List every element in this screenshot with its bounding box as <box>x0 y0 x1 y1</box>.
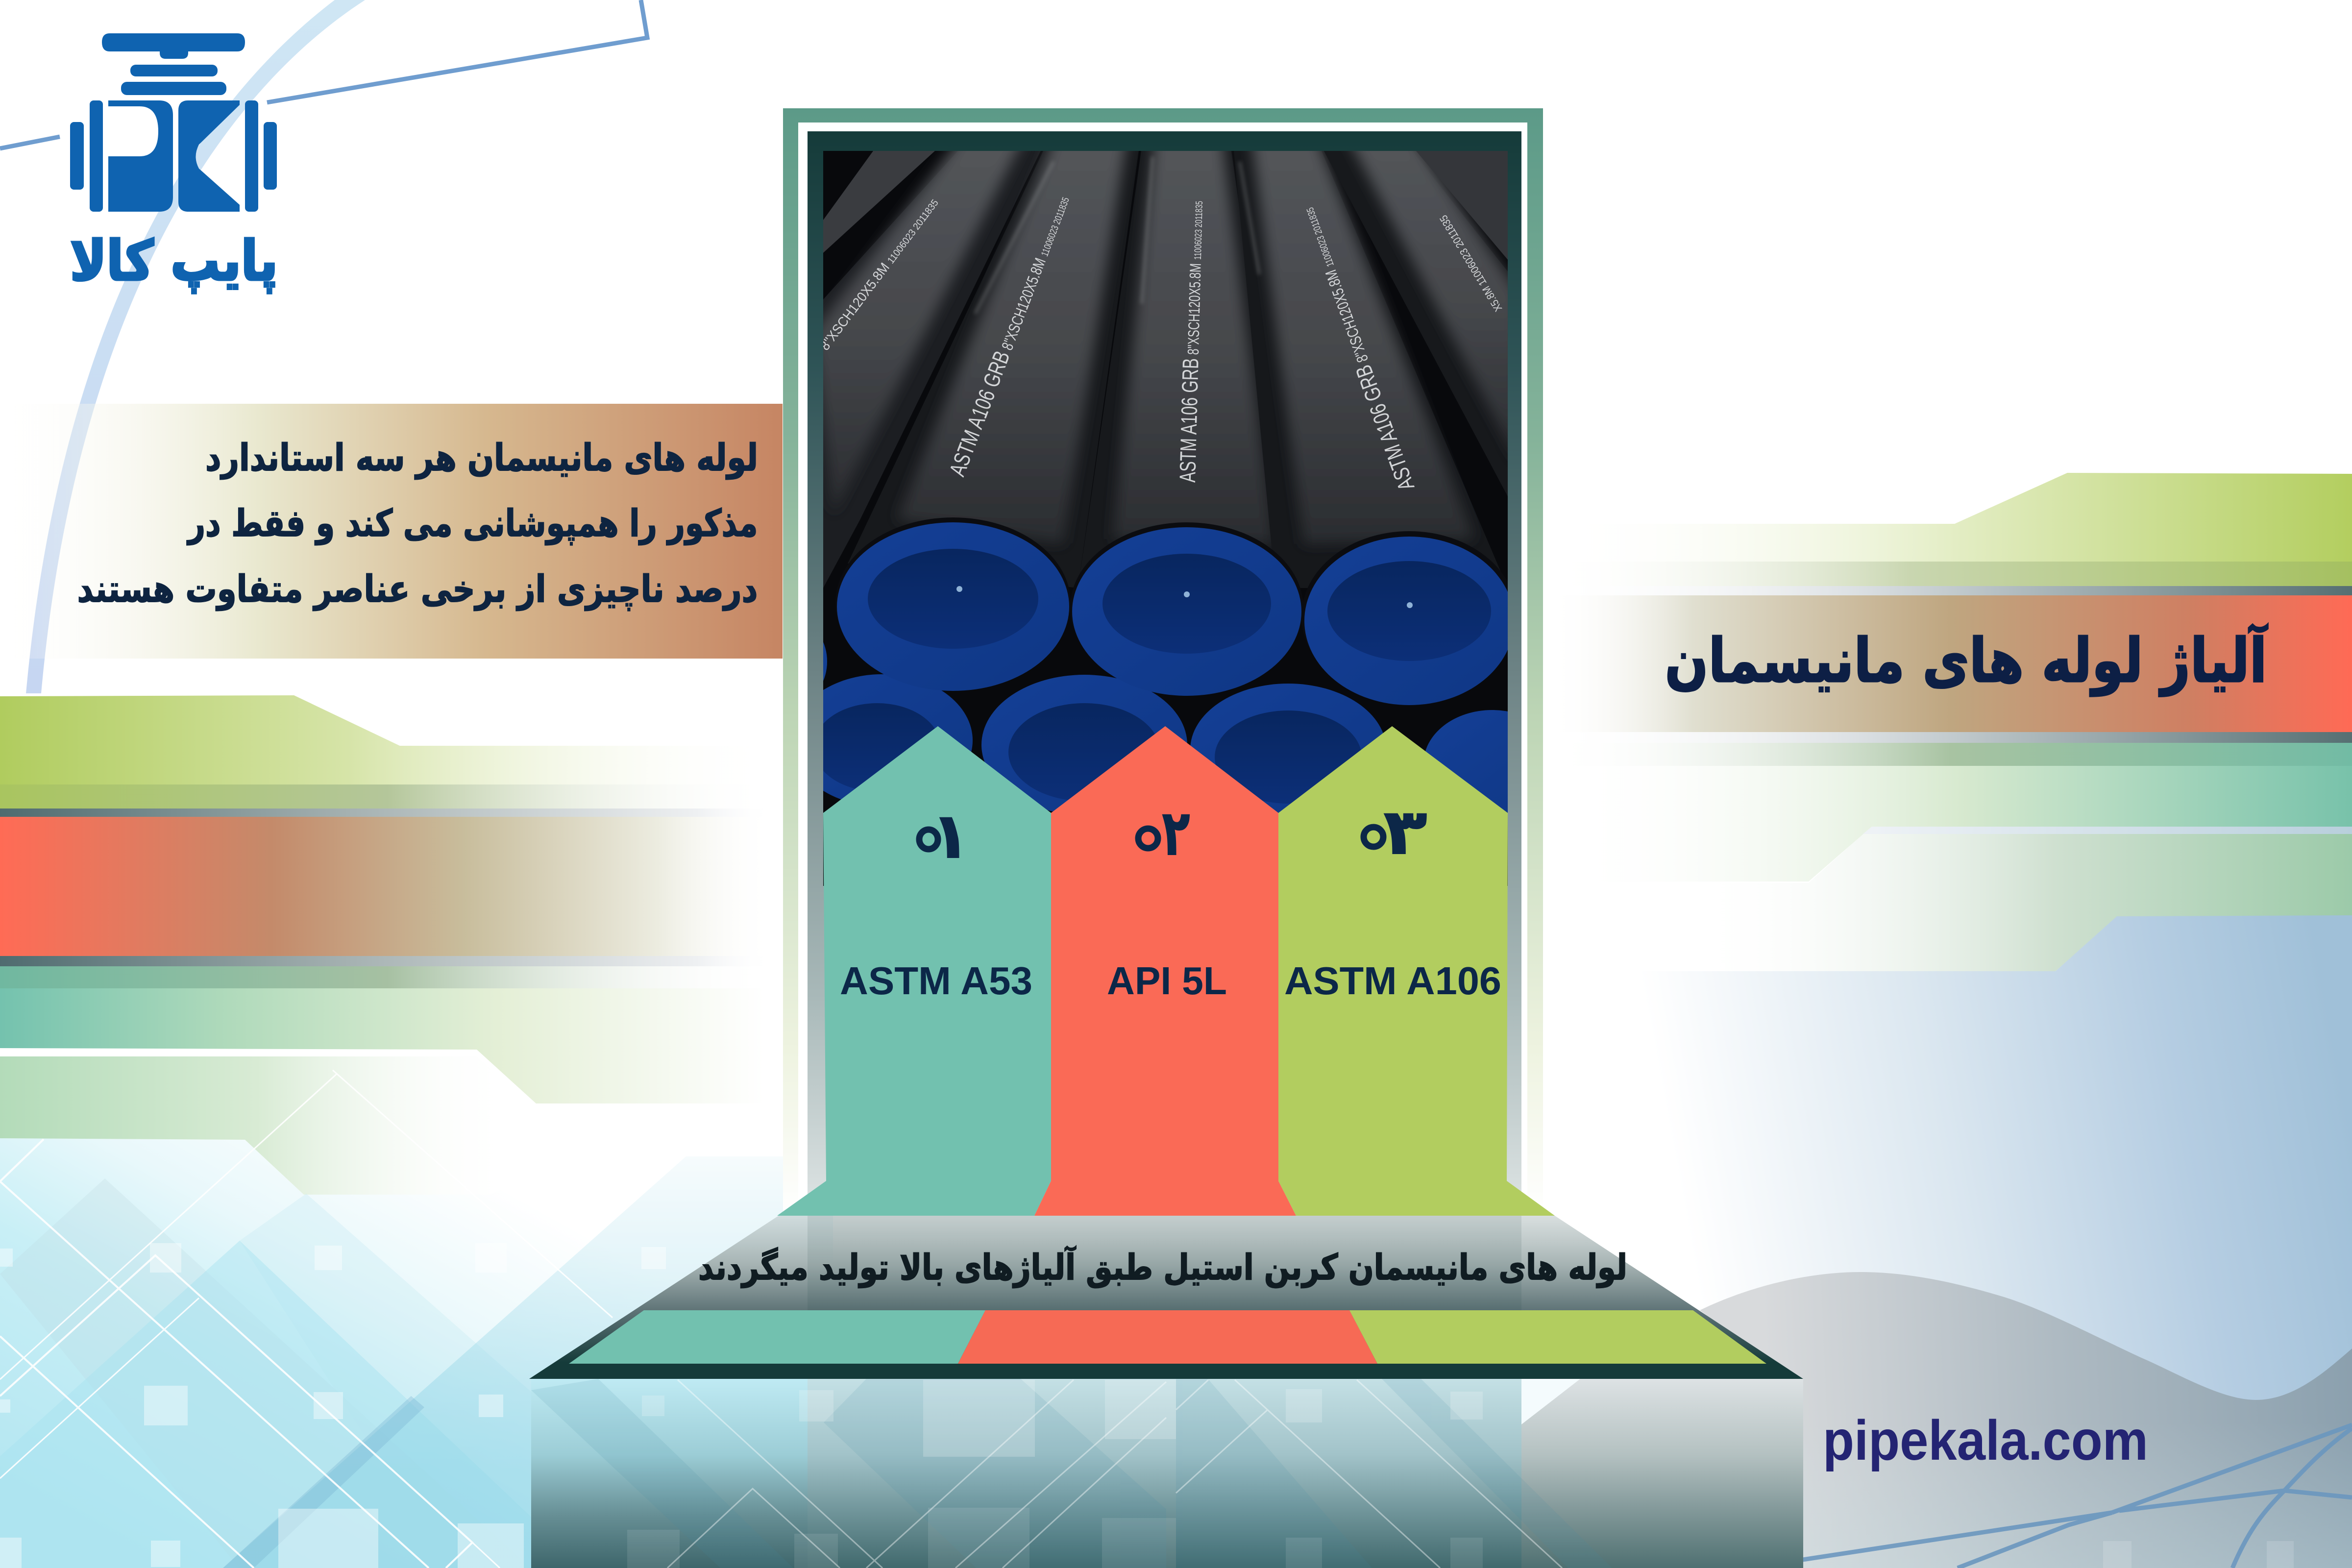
dark green band <box>0 784 774 808</box>
blue background <box>0 1127 804 1568</box>
logo: valve handle <box>102 33 245 59</box>
number 02 <box>1138 797 1190 870</box>
arrow: 01 ASTM A53 <box>777 726 1051 1216</box>
left ribbon bands <box>0 695 784 1103</box>
left section <box>531 1379 808 1568</box>
logo: bars <box>121 65 226 95</box>
arrow: 03 ASTM A106 <box>1278 726 1555 1216</box>
label API 5L: API 5L <box>1107 959 1227 1003</box>
reflection squares <box>627 1380 1483 1568</box>
overlapping diamond shapes <box>0 1156 833 1568</box>
logo: wordmark: پایپ کالا <box>70 229 278 294</box>
number 03: ۰ <box>1365 818 1382 853</box>
pipe 4 <box>1234 122 1508 588</box>
teal band <box>0 988 784 1103</box>
lower row caps <box>780 626 1561 818</box>
dark teal band <box>1548 743 2352 766</box>
wave lower tint <box>1803 1421 2352 1568</box>
caption: لوله های مانیسمان کربن استیل طبق آلیاژهای بالا تولید میگردند <box>698 1246 1627 1288</box>
number 02: ۰ <box>1139 820 1157 854</box>
inner dark frame <box>808 131 1521 1216</box>
second green band <box>1617 834 2352 971</box>
upper row caps <box>835 517 1517 705</box>
bottom left blue geometric pattern <box>0 1056 833 1568</box>
description line 2: مذکور را همپوشانی می کند و فقط در <box>186 501 758 545</box>
under-base reflection <box>531 1379 1803 1568</box>
thin band lower <box>1548 732 2352 743</box>
website: pipekala.com <box>1823 1409 2148 1472</box>
white triangle <box>1521 1379 1580 1424</box>
description line 3: درصد ناچیزی از برخی عناصر متفاوت هستند <box>77 567 758 611</box>
logo: letter K <box>178 100 240 212</box>
green band <box>0 695 774 784</box>
number 03: ۳ <box>1384 796 1427 869</box>
pipe left <box>823 151 1041 588</box>
pipe 6 <box>1416 151 1508 260</box>
white frame gap <box>798 122 1527 1216</box>
thin band <box>0 808 774 817</box>
photo: seamless pipes with blue caps <box>823 151 1508 886</box>
label ASTM A53: ASTM A53 <box>840 959 1032 1003</box>
description line 1: لوله های مانیسمان هر سه استاندارد <box>205 436 758 480</box>
logo: right flange <box>245 100 277 212</box>
pipe 3 <box>1078 122 1294 588</box>
top green band <box>1548 473 2352 562</box>
centre section <box>808 1379 1521 1568</box>
number 02: ۲ <box>1162 797 1190 870</box>
dark teal band <box>0 966 774 988</box>
arrow: 02 API 5L <box>1034 726 1296 1216</box>
logo: left flange <box>70 100 103 212</box>
pipe stamps: ASTM A106 GRB8"XSCH120X5.8M11006023 2011835 <box>1293 205 1419 494</box>
base platform <box>529 1216 1803 1379</box>
diagonal bands <box>531 1379 1612 1568</box>
frame shadow column <box>808 1216 1521 1310</box>
reflection lines <box>667 1380 1562 1568</box>
blue gradient background <box>1519 915 2352 1568</box>
number 01: ۰ <box>920 821 937 855</box>
wave lines <box>1803 1425 2352 1568</box>
pipe stamps: ASTM A106 GRB8"XSCH120X5.8M11006023 2011835 <box>1175 200 1207 483</box>
wave with lines <box>1700 1272 2352 1568</box>
colour band: teal <box>569 1310 985 1364</box>
label ASTM A106: ASTM A106 <box>1284 959 1501 1003</box>
logo <box>70 33 278 294</box>
pipe stamps: ASTM A106 GRB8"XSCH120X5.8M11006023 2011835 <box>944 192 1074 480</box>
frame <box>783 108 1543 1216</box>
decorative blue arc <box>26 0 365 693</box>
pipe stamps: 8"XSCH120X5.8M11006023 2011835 <box>817 195 941 353</box>
white lines <box>0 1070 612 1568</box>
red band <box>0 817 774 956</box>
pipe stamps: X5.8M 11006023 2011835 <box>1437 213 1504 314</box>
logo: letter P <box>108 100 173 212</box>
number 03 <box>1364 796 1427 869</box>
outer green frame <box>783 108 1543 1216</box>
light strip <box>1863 827 2352 834</box>
pipe highlights <box>975 157 1259 314</box>
grey trapezoid <box>529 1216 1803 1379</box>
grey wave <box>1700 1272 2352 1568</box>
thin band lower <box>0 956 774 966</box>
panel: description <box>0 404 783 659</box>
pipe stamps <box>817 192 1504 494</box>
pipe 5 <box>1324 122 1519 496</box>
red title band <box>1548 595 2352 732</box>
pipe far left <box>823 151 935 253</box>
colour band: green <box>1349 1310 1766 1364</box>
decorative thin blue line <box>0 0 647 148</box>
number 01: ۱ <box>931 800 970 873</box>
colour band: red <box>958 1310 1377 1364</box>
pipe 2 <box>848 122 1139 588</box>
faint squares <box>2103 1541 2294 1568</box>
thin band <box>1548 586 2352 595</box>
dark green band <box>1548 562 2352 586</box>
teal band <box>1548 766 2352 882</box>
second green band <box>0 1056 554 1195</box>
right ribbon bands <box>1519 473 2352 1568</box>
right section <box>1521 1379 1803 1568</box>
translucent squares <box>0 1243 666 1568</box>
